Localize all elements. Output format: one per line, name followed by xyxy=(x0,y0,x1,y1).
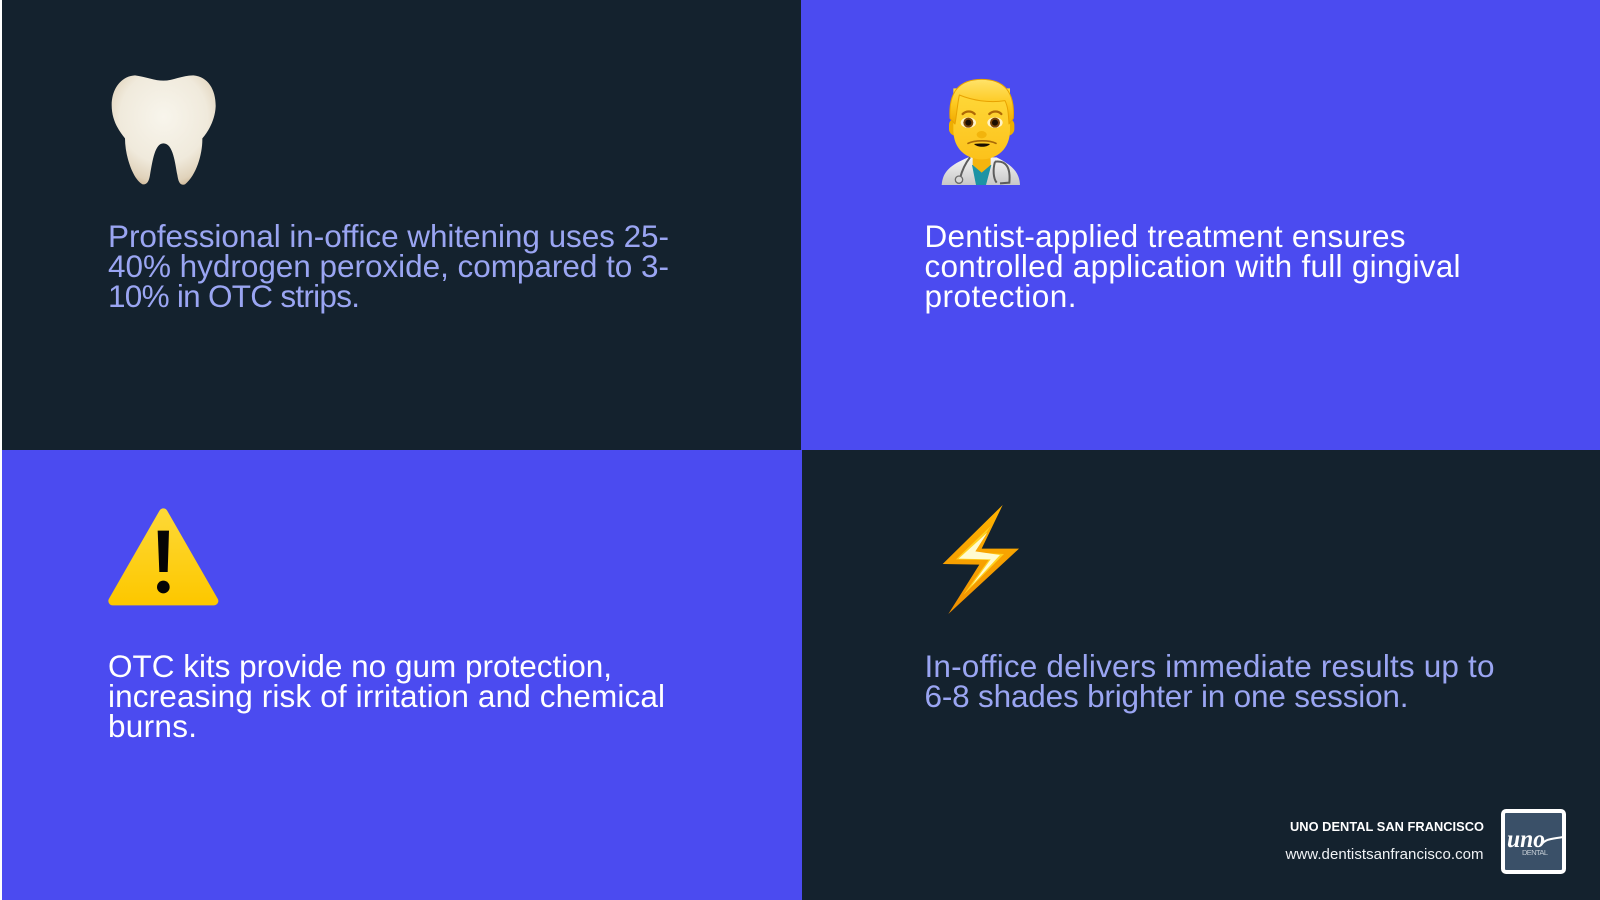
panel background dark xyxy=(2,0,801,450)
logo script: uno xyxy=(1507,826,1545,853)
panel background blue xyxy=(801,0,1600,450)
text: concentration comparison: 40% hydrogen peroxide, compared to 3- xyxy=(108,248,669,284)
text: OTC risk description: OTC kits provide no gum protection, xyxy=(108,648,612,684)
website: www.dentistsanfrancisco.com xyxy=(1284,846,1484,863)
footer brand block xyxy=(1284,811,1564,872)
icon: warning triangle xyxy=(113,513,214,601)
text: OTC risk description: burns. xyxy=(108,708,197,744)
text: treatment description: Dentist-applied treatment ensures xyxy=(924,218,1406,254)
text: concentration comparison: Professional in-office whitening uses 25- xyxy=(108,218,669,254)
logo subtitle: DENTAL xyxy=(1522,848,1548,857)
panel background dark lower xyxy=(802,450,1600,900)
icon: tooth xyxy=(112,75,216,185)
panel: professional concentration xyxy=(2,0,801,450)
text: concentration comparison: 10% in OTC strips. xyxy=(108,278,360,314)
text: treatment description: protection. xyxy=(924,278,1076,314)
panel: immediate results xyxy=(802,450,1600,900)
icon: doctor xyxy=(942,79,1020,185)
logo badge xyxy=(1503,811,1564,872)
panel background blue lower xyxy=(2,450,802,900)
panel: dentist-applied treatment xyxy=(801,0,1600,450)
panel: OTC risks xyxy=(2,450,802,900)
text: OTC risk description: increasing risk of irritation and chemical xyxy=(108,678,665,714)
text: treatment description: controlled application with full gingival xyxy=(924,248,1460,284)
text: results description: 6-8 shades brighter in one session. xyxy=(924,678,1408,714)
text: results description: In-office delivers immediate results up to xyxy=(924,648,1494,684)
icon: lightning bolt xyxy=(943,505,1019,614)
brand name: UNO DENTAL SAN FRANCISCO xyxy=(1290,819,1484,834)
